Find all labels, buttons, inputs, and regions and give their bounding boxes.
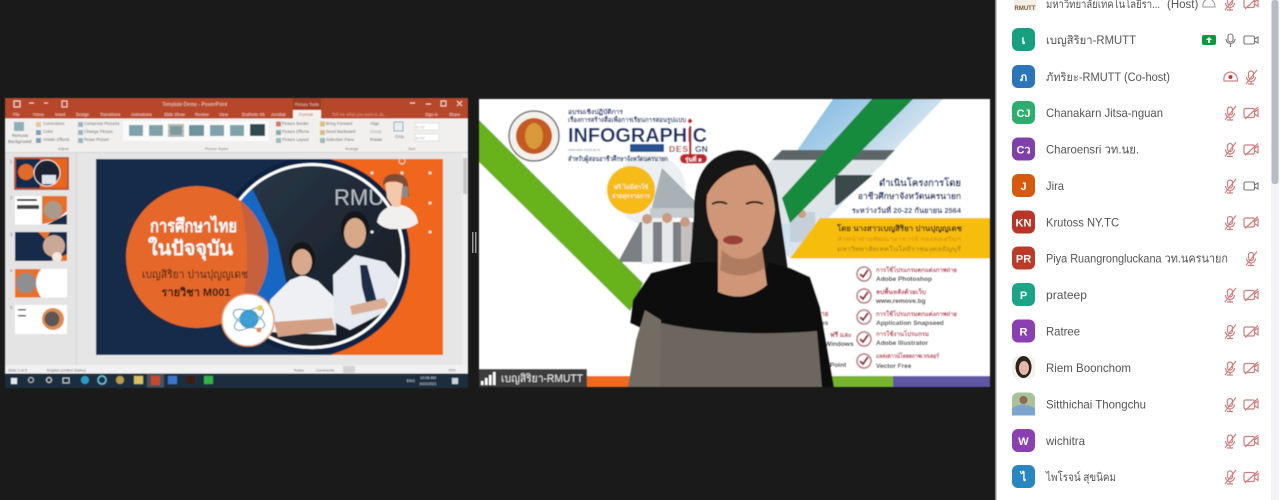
light green diagonal stripe — [479, 120, 643, 311]
scroll bar — [462, 153, 468, 365]
title bar: Format — [299, 112, 314, 117]
panel: presenter video with poster — [479, 99, 990, 387]
ribbon: Size — [408, 147, 415, 151]
panel: participants list — [995, 0, 1280, 500]
eyes — [712, 202, 763, 204]
participant: co-host — [1012, 65, 1257, 88]
slide — [96, 158, 443, 355]
participant: co-host: ภัทริยะ-RMUTT (Co-host) — [1046, 71, 1170, 84]
hair back — [690, 150, 792, 298]
taskbar: 9/22/2021 — [420, 382, 436, 386]
item: Adobe Illustrator: Adobe Illustrator — [876, 340, 928, 347]
participant: Riem: Riem Boonchom — [1046, 361, 1131, 375]
panel: PowerPoint window screen share — [5, 98, 468, 388]
yellow speaker band: หัวหน้าฝ่ายพัฒนาอาจารย์ กองส่งเสริมฯ — [837, 235, 961, 243]
item: Adobe Photoshop: Adobe Photoshop — [876, 276, 932, 283]
ribbon: Picture Border — [282, 121, 309, 126]
title bar: Animations — [131, 112, 152, 117]
poster title: DES — [669, 144, 688, 154]
ribbon: Crop — [395, 134, 405, 139]
thumbnail 5 — [15, 305, 67, 334]
status bar — [5, 365, 468, 374]
yellow badge: จ่ายทุกรายการ — [612, 193, 651, 200]
participant: Jira — [1012, 174, 1258, 197]
orange title circle: ในปัจจุบัน — [148, 236, 233, 261]
participant: Piya — [1012, 246, 1257, 270]
title bar: File — [13, 112, 20, 117]
participant: wichitra: W — [1018, 436, 1029, 448]
title bar: View — [219, 112, 229, 117]
thumbnail 1 — [14, 157, 69, 190]
face and neck — [706, 165, 775, 297]
icon: atom badge — [222, 294, 274, 346]
taskbar — [5, 374, 468, 388]
status bar: Slide 1 of 5 — [8, 368, 27, 372]
checklist — [857, 266, 957, 370]
item: remove.bg: www.remove.bg — [875, 298, 926, 305]
name tag — [479, 369, 587, 387]
project organiser text: ดำเนินโครงการโดย — [879, 177, 961, 189]
item: Adobe Illustrator — [857, 330, 929, 347]
participant: wichitra: wichitra — [1045, 434, 1085, 448]
item: Vector Free: Vector Free — [876, 363, 912, 370]
participant: wichitra — [1012, 429, 1258, 452]
yellow speaker band — [790, 218, 990, 258]
orange title circle: การศึกษาไทย — [150, 215, 237, 236]
status bar: Comments — [316, 368, 334, 372]
project organiser text: ระหว่างวันที่ 20-22 กันยายน 2564 — [852, 204, 962, 215]
left sleeve — [628, 310, 661, 387]
thumbnail pane: 2 — [10, 195, 13, 200]
poster title: GN — [695, 144, 708, 154]
participant: Chanakarn: CJ — [1016, 108, 1031, 120]
ribbon: Reset Picture — [84, 137, 110, 142]
orange title circle: เบญสิริยา ปานปุญญเดช — [142, 269, 248, 281]
project organiser text — [852, 177, 962, 215]
checklist left fragments: Windows — [825, 341, 854, 348]
divider handle — [472, 232, 476, 253]
item: Adobe Illustrator: การใช้งานโปรแกรม — [876, 330, 929, 338]
body black top — [628, 262, 834, 387]
ribbon: Selection Pane — [326, 137, 355, 142]
ribbon: Color — [43, 129, 54, 134]
participant: Charoensri: Charoensri วท.นย. — [1046, 142, 1139, 156]
participant: prateep: prateep — [1046, 288, 1087, 302]
participant: Chanakarn — [1012, 101, 1258, 124]
dark green diagonal stripe — [782, 99, 913, 223]
participant: Chanakarn: Chanakarn Jitsa-nguan — [1046, 106, 1163, 120]
title bar: Review — [195, 112, 210, 117]
thumbnail pane: 1 — [10, 159, 13, 164]
item: Vector Free: แหล่งดาวน์โหลดภาพเวกเตอร์ — [876, 352, 940, 360]
participant: presenter: เบญสิริยา-RMUTT — [1046, 34, 1136, 47]
title bar: Template Demo - PowerPoint — [162, 102, 228, 108]
ribbon: Remove — [12, 133, 29, 138]
ribbon: Align — [370, 121, 380, 126]
orange title circle: รายวิชา M001 — [162, 286, 230, 299]
ribbon: Rotate — [370, 137, 383, 142]
participant: prateep — [1012, 283, 1258, 306]
participant: Sitthichai — [1012, 392, 1258, 416]
participant: Riem — [1012, 356, 1258, 379]
checklist left fragments: าย — [821, 311, 829, 318]
item: Application Snapseed: การใช้โปรแกรมตกแต่งภาพถ่าย — [876, 310, 957, 318]
participant: Krutoss: KN — [1016, 218, 1031, 230]
item: remove.bg — [857, 286, 926, 305]
ribbon: Adjust — [58, 147, 69, 151]
item: remove.bg: ลบพื้นหลังด้วยเว็บ — [876, 286, 926, 296]
participant: Jira: Jira — [1046, 179, 1064, 193]
ribbon: Picture Layout — [282, 137, 310, 142]
participant: Krutoss: Krutoss NY.TC — [1046, 216, 1119, 230]
poster title: รุ่นที่ ๑ — [685, 154, 702, 164]
ribbon: 0.71" — [416, 124, 426, 130]
participant: Ratree: Ratree — [1046, 324, 1080, 338]
item: Adobe Photoshop: การใช้โปรแกรมตกแต่งภาพถ่าย — [876, 266, 957, 274]
taskbar: 10:08 AM — [420, 376, 436, 380]
ribbon: Arrange — [345, 147, 359, 151]
yellow badge: ฟรี ไม่มีค่าใช้ — [614, 183, 648, 191]
status bar: Notes — [294, 368, 304, 372]
ribbon: Picture Styles — [205, 147, 228, 151]
gray circle and building behind badge — [622, 154, 695, 224]
participant: Sitthichai: Sitthichai Thongchu — [1046, 398, 1146, 412]
checklist left fragments: ฟรี และ — [830, 331, 852, 339]
project organiser text: อาชีวศึกษาจังหวัดนครนายก — [858, 191, 961, 201]
ribbon: Group — [370, 129, 382, 134]
ribbon: Picture Effects — [282, 129, 309, 134]
title bar: Share — [449, 112, 461, 117]
sky and building stripe — [766, 98, 943, 258]
poster title: อบรมเชิงปฏิบัติการ — [568, 108, 624, 116]
title bar: Home — [33, 112, 45, 117]
gray dress — [648, 323, 822, 387]
title bar: Transitions — [100, 112, 120, 117]
thumbnail 4 — [15, 269, 67, 298]
participant: presenter — [1012, 28, 1258, 51]
participant: Charoensri: Cว — [1016, 144, 1031, 156]
checklist left fragments: Point — [830, 362, 847, 369]
participant: Ratree: R — [1020, 326, 1028, 338]
checklist left fragments: es — [821, 320, 829, 327]
title bar: Design — [76, 112, 90, 117]
participant: host: RMUTT — [1014, 6, 1036, 12]
item: Application Snapseed: Application Snapseed — [876, 320, 944, 327]
ribbon: Background — [8, 139, 32, 144]
name tag: เบญสิริยา-RMUTT — [501, 373, 583, 385]
poster bottom colour bars — [587, 376, 990, 387]
student boy — [333, 211, 400, 330]
status bar: 76% — [448, 368, 456, 372]
participant: presenter: เ — [1022, 35, 1026, 47]
thumbnail pane: 5 — [10, 305, 13, 310]
participant: Charoensri — [1012, 138, 1258, 160]
item: Vector Free — [857, 352, 940, 370]
photo of students: RMUT — [334, 185, 398, 210]
ribbon: Send Backward — [326, 129, 356, 134]
title bar: Picture Tools — [295, 102, 319, 107]
ribbon: Artistic Effects — [43, 137, 69, 142]
thumbnail pane: 4 — [10, 268, 13, 273]
title bar: Slide Show — [164, 112, 186, 117]
presenter — [628, 150, 834, 387]
orange title circle — [126, 186, 268, 328]
thumbnail 3 — [15, 232, 67, 262]
poster title — [568, 108, 708, 164]
emblem — [509, 111, 559, 161]
checklist left fragments — [821, 311, 854, 369]
thumbnail pane — [5, 153, 77, 365]
ribbon: 0.71" — [416, 136, 426, 140]
ribbon: Bring Forward — [326, 121, 353, 126]
participant: Piya: Piya Ruangrongluckana วท.นครนายก — [1046, 252, 1228, 266]
ribbon: Compress Pictures — [84, 121, 119, 126]
thumbnail pane: 3 — [10, 232, 13, 237]
poster title: สำหรับผู้สอนอาชีวศึกษาจังหวัดนครนายก — [568, 154, 668, 164]
ribbon: Corrections — [43, 121, 64, 126]
yellow badge — [607, 166, 655, 214]
scroll thumb — [1272, 0, 1278, 184]
title bar: EndNote X9 — [242, 112, 265, 117]
title bar — [5, 98, 468, 118]
poster title: www.web.rmutt.ac.th — [568, 148, 600, 152]
status bar: English (United States) — [47, 368, 87, 372]
taskbar: ENG — [407, 379, 415, 383]
participant: Krutoss — [1012, 210, 1258, 234]
item: Application Snapseed — [857, 310, 957, 327]
participant: host — [1014, 0, 1258, 12]
lips — [723, 236, 743, 244]
yellow speaker band: มหาวิทยาลัยเทคโนโลยีราชมงคลธัญบุรี — [837, 245, 962, 253]
participant: prateep: P — [1020, 290, 1027, 302]
student girl — [268, 242, 336, 337]
title bar: Acrobat — [271, 112, 286, 117]
ribbon: Change Picture — [84, 129, 114, 134]
icon: support agent avatar with selection handles — [370, 158, 432, 234]
participant: Pairoj: ไพโรจน์ สุขนิคม — [1045, 470, 1116, 484]
participant: co-host: ภ — [1020, 72, 1027, 84]
neck shadow — [720, 250, 765, 276]
participant: Jira: J — [1020, 181, 1027, 193]
poster title: เรื่องการสร้างสื่อเพื่อการเรียนการสอนรูปแบบ — [568, 114, 686, 125]
participant: Pairoj: ไ — [1019, 470, 1027, 484]
title bar: Sign in — [425, 112, 438, 117]
poster business people — [618, 210, 815, 264]
participant: Piya: PR — [1016, 254, 1031, 266]
ribbon — [5, 118, 468, 153]
thumbnail 2 — [15, 196, 67, 224]
item: Adobe Photoshop — [857, 266, 957, 283]
participant: Ratree — [1012, 320, 1258, 342]
title bar: Insert — [55, 112, 66, 117]
participant: Pairoj — [1012, 465, 1258, 488]
poster title: INFOGRAPHIC — [568, 124, 707, 147]
photo of students — [236, 185, 400, 337]
title bar: Tell me what you want to do... — [332, 112, 387, 117]
yellow speaker band: โดย นางสาวเบญสิริยา ปานปุญญเดช — [836, 223, 962, 233]
